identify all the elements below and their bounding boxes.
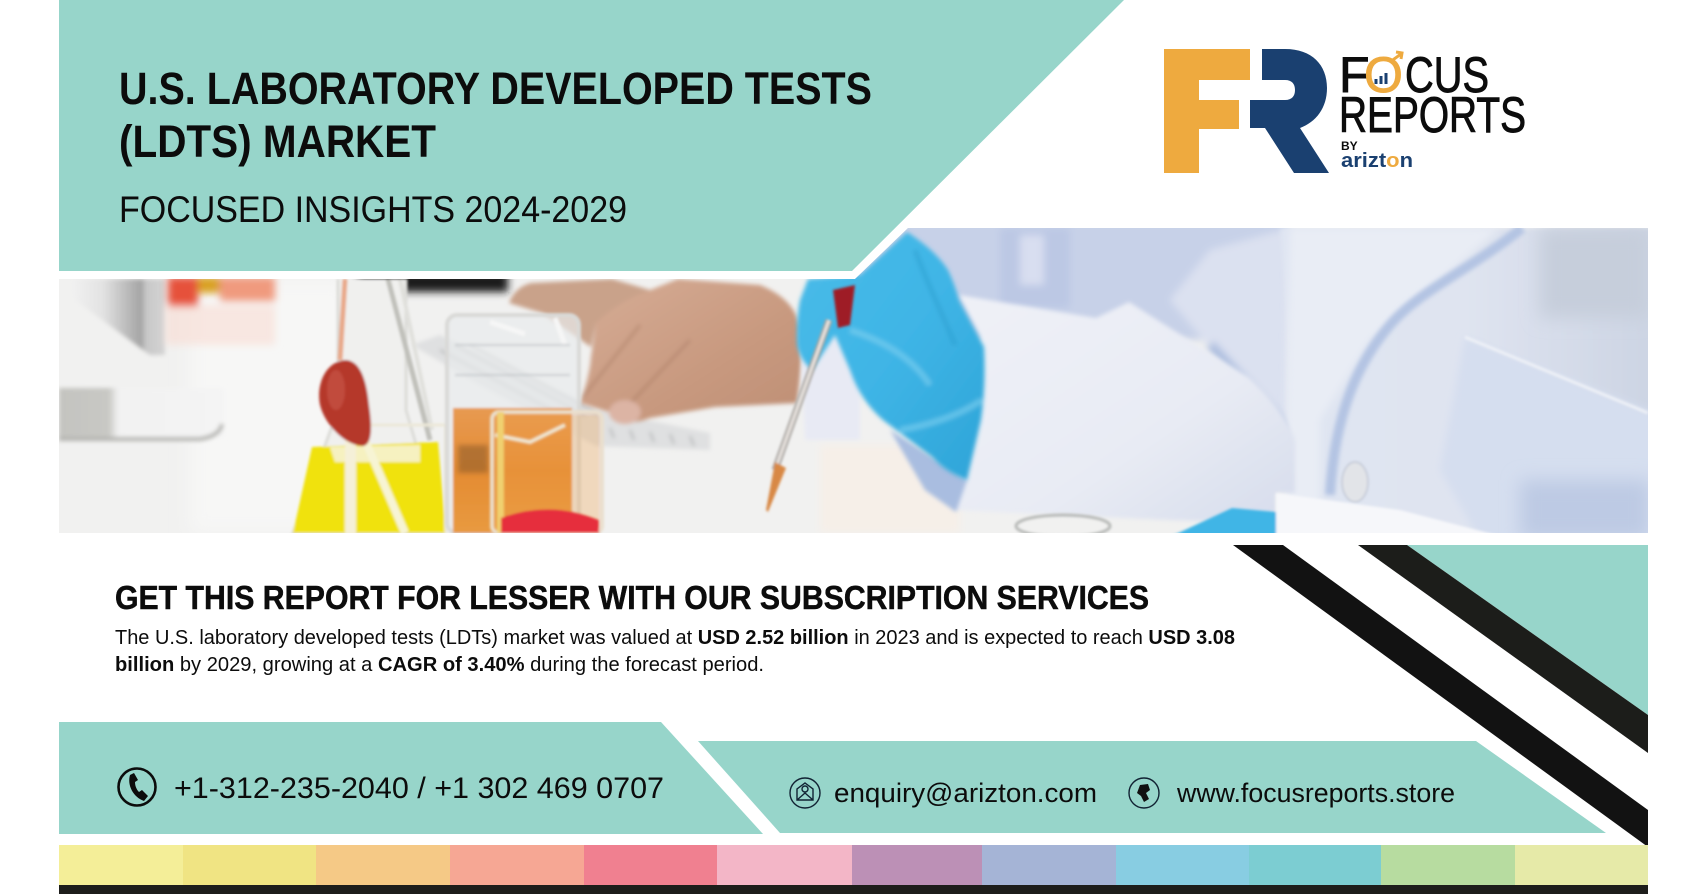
white sleeve of coat [954, 295, 1295, 523]
wordmark [1339, 47, 1526, 172]
market summary paragraph: The U.S. laboratory developed tests (LDTs) market was valued at USD 2.52 billion in 2023 and is expected to reach USD 3.08 [115, 627, 1235, 649]
subtitle: FOCUSED INSIGHTS 2024-2029 [119, 189, 627, 230]
front beaker with red liquid [492, 412, 602, 533]
subscription heading: GET THIS REPORT FOR LESSER WITH OUR SUBSCRIPTION SERVICES [115, 579, 1149, 616]
icon: phone [118, 768, 156, 806]
photo: lab technician with coloured flasks [59, 220, 1655, 540]
wordmark: F [1339, 47, 1370, 103]
market summary paragraph: billion by 2029, growing at a CAGR of 3.40% during the forecast period. [115, 654, 764, 676]
wordmark: BY [1341, 139, 1358, 153]
email address: enquiry@arizton.com [834, 778, 1097, 808]
chest of lab coat [1280, 228, 1655, 540]
wordmark: arizton [1341, 150, 1413, 172]
back shirt cuff [798, 343, 857, 438]
hands [509, 279, 802, 424]
sleeve shadow under cuff [890, 430, 967, 512]
decorative teal corner with black stripes [1233, 545, 1648, 847]
table foreground tint [820, 445, 960, 533]
icon: FR monogram [1164, 49, 1329, 173]
pipette [766, 320, 829, 512]
title panel [59, 0, 1124, 271]
icon: email [790, 778, 820, 808]
monitor and blurred background objects [59, 279, 224, 439]
wordmark: REPORTS [1339, 87, 1526, 143]
heading: report title: (LDTS) MARKET [119, 116, 436, 167]
wordmark: CUS [1405, 47, 1489, 103]
website address: www.focusreports.store [1176, 778, 1455, 808]
logo: Focus Reports by Arizton [1164, 47, 1526, 173]
panel: email and website [698, 741, 1606, 833]
photo background [59, 279, 1207, 533]
heading: report title [119, 63, 872, 167]
heading: report title: U.S. LABORATORY DEVELOPED TESTS [119, 63, 872, 114]
keyboard [412, 335, 710, 450]
rear beaker with orange liquid [447, 315, 579, 533]
red pipette clamp [833, 285, 855, 328]
colour band [59, 845, 1648, 894]
icon: globe [1129, 778, 1159, 808]
phone numbers: +1-312-235-2040 / +1 302 469 0707 [174, 772, 664, 805]
coat background [855, 228, 1288, 424]
blue glove holding pipette [797, 232, 985, 480]
flask with yellow liquid [293, 279, 446, 535]
panel: phone contact [59, 722, 763, 834]
paper and glove at bottom [1014, 494, 1491, 533]
market summary paragraph [115, 627, 1235, 676]
wordmark: O [1364, 47, 1403, 103]
